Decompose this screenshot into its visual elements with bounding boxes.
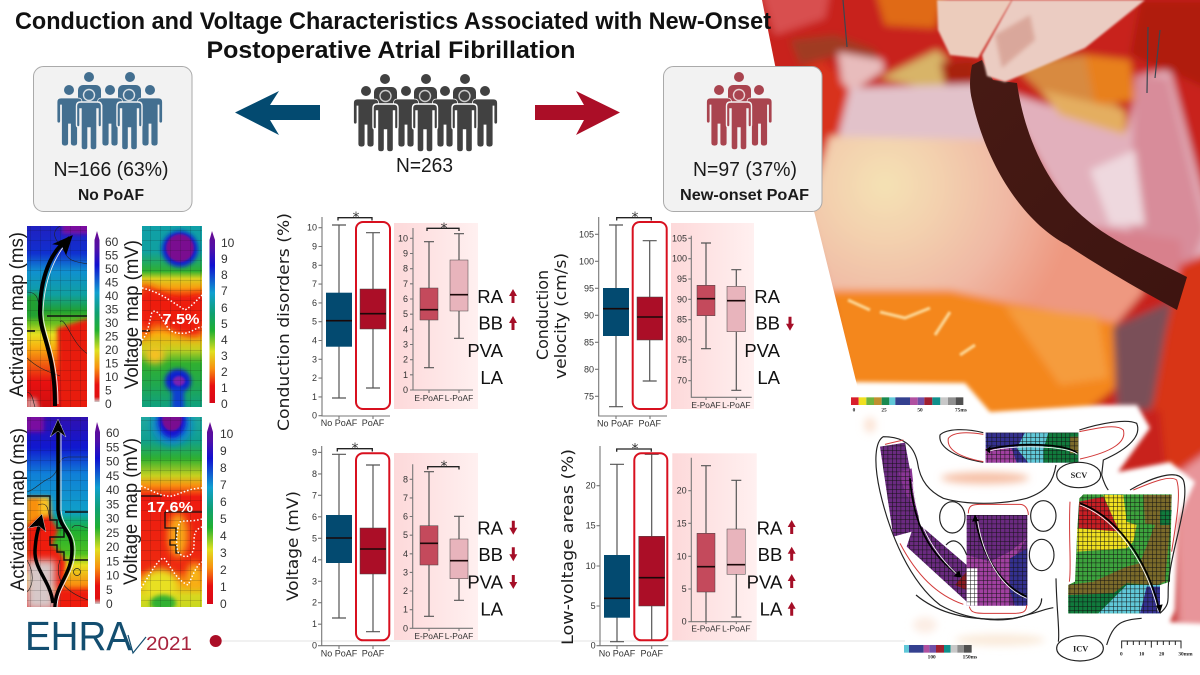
colour bar: activation: 20 [105, 343, 119, 357]
regional labels and arrows [744, 286, 794, 388]
x labels [321, 649, 385, 659]
inset panel: early and late PoAF: * [440, 459, 448, 475]
colour bar: voltage: 9 [221, 252, 228, 266]
significance bracket: * [352, 441, 358, 457]
panel: maps of patient with PoAF [8, 404, 234, 611]
y axis label: Voltage (mV) [283, 491, 302, 601]
photo: gloved fingers [937, 0, 1012, 58]
regional labels and arrows: PVA [467, 340, 504, 361]
colour bar: activation: 15 [105, 356, 119, 370]
chart: conduction disorders: 5 [312, 317, 317, 327]
significance bracket: * [632, 442, 638, 458]
regional labels and arrows: RA [754, 286, 781, 307]
inset panel: early and late PoAF [671, 223, 754, 410]
white fade behind the epicardial mapping scheme [840, 382, 1200, 675]
regional labels and arrows: BB [758, 544, 782, 565]
background photo: opened heart during surgery [762, 0, 1200, 626]
dark area and right red tissue [1113, 300, 1175, 410]
regional labels and arrows: BB [478, 544, 503, 565]
chart: conduction velocity: 105 [579, 229, 594, 239]
heat map: activation [27, 226, 87, 407]
legend: bottom colour scale: 150ms [963, 655, 977, 661]
chart: voltage: 5 [312, 533, 317, 543]
inset panel: early and late PoAF: * [440, 221, 448, 237]
scale bar [1120, 641, 1193, 658]
x labels: PoAF [638, 419, 661, 429]
y axis label: Low-voltage areas (%) [558, 449, 577, 645]
colour bar: voltage: 9 [220, 444, 227, 458]
inset panel: early and late PoAF: 5 [403, 530, 408, 540]
inset panel: early and late PoAF: E-PoAF [691, 400, 721, 410]
colour bar: voltage: 1 [220, 580, 227, 594]
box: No PoAF [604, 464, 630, 642]
y axis label: Conduction disorders (%) [274, 213, 293, 431]
label: No PoAF: No PoAF [78, 187, 144, 204]
x labels [597, 419, 661, 429]
chart: voltage: 2 [312, 598, 317, 608]
inset panel: early and late PoAF: 10 [677, 551, 687, 561]
colour bar: activation: 45 [106, 469, 120, 483]
chart: conduction velocity [533, 210, 794, 429]
pericardium band [838, 84, 990, 145]
colour bar: activation: 50 [106, 454, 120, 468]
label: SCV [1057, 462, 1101, 488]
colour bar: voltage: 2 [220, 563, 227, 577]
colour bar: voltage: 3 [220, 546, 227, 560]
colour bar: activation: 15 [106, 554, 120, 568]
chart: low-voltage areas: 20 [586, 481, 596, 491]
logo: EHRA 2021 [25, 613, 222, 659]
inset panel: early and late PoAF: E-PoAF [691, 624, 721, 634]
colour bar: activation: 40 [106, 483, 120, 497]
inset panel: early and late PoAF: 85 [677, 315, 687, 325]
regional labels and arrows: LA [480, 598, 504, 620]
inset panel: early and late PoAF: 80 [677, 335, 687, 345]
inset panel: early and late PoAF: 1 [403, 370, 408, 380]
chart: conduction velocity: 80 [584, 364, 594, 374]
label: N=97 (37%): N=97 (37%) [693, 159, 797, 181]
inset panel: early and late PoAF [394, 453, 478, 641]
inset panel: early and late PoAF [672, 453, 757, 640]
label: ICV [1057, 636, 1103, 661]
regional labels and arrows: RA [477, 518, 504, 538]
y axis label: velocity (cm/s) [551, 253, 570, 379]
significance bracket [617, 210, 651, 226]
map: superior right atrium strip [986, 433, 1078, 463]
legend: bottom colour scale: 100 [928, 655, 936, 661]
colour bar: activation: 40 [105, 289, 119, 303]
title: Postoperative Atrial Fibrillation [206, 37, 576, 64]
colour bar: voltage: 3 [221, 349, 228, 363]
colour bar: voltage [210, 231, 235, 411]
axis label: voltage map: Voltage map (mV) [121, 438, 142, 585]
orange fat [830, 290, 1115, 420]
colour bar: voltage: 10 [220, 427, 234, 441]
y axis label: Conduction [533, 270, 552, 360]
chart: low-voltage areas: 0 [591, 641, 596, 651]
regional labels and arrows [747, 518, 796, 620]
arrow: to No PoAF [235, 91, 320, 135]
x labels: PoAF [362, 649, 385, 659]
colour bar: activation: 60 [105, 235, 119, 249]
chart: conduction velocity: 85 [584, 337, 594, 347]
colour bar: activation: 30 [106, 512, 120, 526]
regional labels and arrows: RA [757, 518, 783, 538]
colour bar: voltage: 5 [221, 317, 228, 331]
y axis label [533, 253, 570, 379]
x labels: PoAF [640, 649, 663, 659]
icon: people group (red) [706, 72, 772, 150]
chart: low-voltage areas: 15 [586, 521, 596, 531]
arrows: conduction paths [28, 419, 75, 607]
inset panel: early and late PoAF: 100 [672, 254, 687, 264]
heat map: activation [27, 417, 88, 607]
significance bracket: * [632, 210, 638, 226]
chart: voltage: 9 [312, 447, 317, 457]
axis label: voltage map: Voltage map (mV) [122, 240, 143, 389]
inset panel: early and late PoAF: 90 [677, 294, 687, 304]
inset panel: early and late PoAF: 4 [403, 324, 408, 334]
inset panel: early and late PoAF: 3 [403, 340, 408, 350]
regional labels and arrows [467, 286, 517, 388]
logo line [222, 640, 905, 642]
inset panel: early and late PoAF: 2 [403, 355, 408, 365]
inset panel: early and late PoAF: E-PoAF [414, 631, 444, 641]
inset panel: early and late PoAF: 15 [677, 518, 687, 528]
legend: bottom colour scale [904, 645, 977, 661]
colour bar: activation: 45 [105, 276, 119, 290]
box: PoAF [639, 454, 665, 640]
box: No PoAF [603, 225, 629, 407]
logo: EHRA 2021: EHRA [25, 613, 133, 659]
chart: conduction disorders: 9 [312, 242, 317, 252]
low-voltage contour [142, 288, 202, 340]
heat map: voltage [141, 404, 203, 611]
inset panel: early and late PoAF: 8 [403, 474, 408, 484]
panel: total population [354, 74, 498, 177]
chart: voltage: 8 [312, 469, 317, 479]
box: PoAF [360, 233, 386, 388]
significance bracket [338, 210, 372, 226]
label: N=263: N=263 [396, 155, 453, 177]
label: N=166 (63%): N=166 (63%) [54, 159, 168, 181]
colour bar: activation: 50 [105, 262, 119, 276]
colour bar: activation: 55 [106, 440, 120, 454]
box: No PoAF [326, 454, 352, 618]
regional labels and arrows: LA [760, 598, 783, 620]
inset panel: early and late PoAF: 1 [403, 605, 408, 615]
colour bar: activation: 25 [105, 330, 119, 344]
colour bar: voltage: 1 [221, 381, 228, 395]
box: PoAF [637, 241, 663, 381]
big pale atrium [808, 136, 1145, 325]
logo: EHRA 2021: 2021 [146, 634, 192, 655]
title [15, 8, 771, 64]
chart: conduction disorders: 3 [312, 354, 317, 364]
inset panel: early and late PoAF: L-PoAF [722, 400, 751, 410]
x labels: No PoAF [597, 419, 634, 429]
diagram: epicardial mapping scheme of the atria [851, 397, 1193, 661]
box: No PoAF [326, 225, 352, 398]
colour bar: voltage: 8 [221, 268, 228, 282]
colour bar: activation: 35 [106, 497, 120, 511]
inset panel: early and late PoAF: 70 [677, 376, 687, 386]
colour bar: voltage: 7 [221, 284, 228, 298]
chart: conduction disorders: 6 [312, 298, 317, 308]
colour bar: voltage: 4 [220, 529, 227, 543]
regional labels and arrows: BB [755, 312, 780, 334]
inset panel: early and late PoAF: L-PoAF [722, 624, 751, 634]
legend: top colour scale: 50 [917, 408, 923, 414]
low-voltage contour [141, 486, 202, 588]
chart: conduction velocity: 90 [584, 310, 594, 320]
regional labels and arrows [467, 518, 517, 620]
chart: conduction disorders: 8 [312, 260, 317, 270]
regional labels and arrows: PVA [467, 572, 504, 592]
colour bar: activation: 0 [106, 597, 113, 611]
significance bracket: * [352, 210, 360, 226]
upper right tissue [1018, 62, 1200, 266]
chart: low-voltage areas: 10 [586, 561, 596, 571]
callout: 7.5%: 7.5% [162, 311, 200, 328]
arrow: conduction path [40, 236, 72, 406]
inset panel: early and late PoAF: 7 [403, 493, 408, 503]
regional labels and arrows: PVA [747, 572, 783, 592]
axis label: activation map: Activation map (ms) [8, 428, 29, 591]
colour bar: activation: 25 [106, 526, 120, 540]
faint tissue patches in the white fade [864, 417, 1045, 646]
colour bar: activation [94, 231, 119, 411]
inset panel: early and late PoAF: 10 [398, 233, 408, 243]
photo: sutures [843, 0, 1160, 93]
inset panel: early and late PoAF: 8 [403, 264, 408, 274]
highlight: PoAF outline [356, 453, 389, 640]
inset panel: early and late PoAF: 3 [403, 567, 408, 577]
highlight: PoAF outline [633, 222, 667, 409]
chart: conduction disorders: 1 [312, 392, 317, 402]
inset panel: early and late PoAF: L-PoAF [445, 393, 473, 403]
chart: voltage: 7 [312, 490, 317, 500]
callout: 17.6%: 17.6% [147, 499, 193, 516]
inset panel: early and late PoAF: E-PoAF [414, 393, 444, 403]
colour bar: voltage [207, 422, 234, 611]
legend: top colour scale [851, 397, 967, 414]
photo: fat highlights [848, 300, 975, 355]
colour bar: voltage: 5 [220, 512, 227, 526]
x labels [599, 649, 663, 659]
legend: top colour scale: 0 [853, 408, 856, 414]
main axes [595, 217, 667, 419]
colour bar: voltage: 7 [220, 478, 227, 492]
inset panel: early and late PoAF: 5 [682, 584, 687, 594]
inset panel: early and late PoAF: 6 [403, 512, 408, 522]
chart: low-voltage areas: 5 [591, 601, 596, 611]
colour bar: voltage: 6 [220, 495, 227, 509]
regional labels and arrows: PVA [744, 340, 781, 361]
colour bar: activation: 20 [106, 540, 120, 554]
inset panel: early and late PoAF: 2 [403, 586, 408, 596]
x labels: No PoAF [321, 418, 358, 428]
colour bar: activation [95, 422, 120, 611]
anatomical outline: inner red lines [885, 427, 1178, 613]
inset panel: early and late PoAF: 4 [403, 549, 408, 559]
chart: conduction disorders [274, 210, 517, 431]
significance bracket [337, 441, 372, 457]
regional labels and arrows: LA [757, 367, 781, 388]
colour bar: voltage: 6 [221, 301, 228, 315]
inset panel: early and late PoAF: 5 [403, 309, 408, 319]
panel: maps of patient without PoAF [7, 222, 235, 411]
chart: voltage: 3 [312, 576, 317, 586]
chart: conduction velocity: 95 [584, 283, 594, 293]
colour bar: activation: 30 [105, 316, 119, 330]
label: New-onset PoAF: New-onset PoAF [680, 187, 809, 204]
arrows: conduction direction [910, 445, 1163, 613]
label: ICV: ICV [1073, 645, 1088, 654]
legend: top colour scale: 75ms [955, 408, 967, 414]
colour bar: activation: 5 [105, 384, 112, 398]
inset panel: early and late PoAF: 9 [403, 248, 408, 258]
chart: voltage: 0 [312, 641, 317, 651]
inset panel: early and late PoAF: 7 [403, 279, 408, 289]
chart: conduction disorders: 4 [312, 336, 317, 346]
highlight: PoAF outline [356, 222, 390, 409]
inset panel: early and late PoAF: 95 [677, 274, 687, 284]
chart: conduction velocity: 75 [584, 391, 594, 401]
inset panel: early and late PoAF: 20 [677, 486, 687, 496]
colour bar: activation: 10 [105, 370, 119, 384]
main axes [318, 446, 390, 649]
icon: people group (grey) [354, 74, 498, 152]
x labels: No PoAF [321, 649, 358, 659]
title: Conduction and Voltage Characteristics Associated with New-Onset [15, 8, 771, 35]
inset panel: early and late PoAF: L-PoAF [445, 631, 473, 641]
map: left strip [880, 443, 967, 602]
map: central patch [967, 515, 1027, 606]
heat map: voltage [142, 226, 202, 410]
colour bar: voltage: 8 [220, 461, 227, 475]
main axes [596, 446, 668, 649]
main axes [318, 217, 390, 419]
regional labels and arrows: BB [478, 312, 503, 334]
panel: New-onset PoAF group [664, 66, 822, 212]
inset panel: early and late PoAF: 0 [682, 617, 687, 627]
chart: voltage [283, 441, 517, 659]
colour bar: voltage: 0 [220, 597, 227, 611]
colour bar: activation: 35 [105, 302, 119, 316]
colour bar: activation: 55 [105, 248, 119, 262]
colour bar: activation: 10 [106, 568, 120, 582]
axis label: activation map: Activation map (ms) [7, 232, 28, 397]
map: right atrial patch [1068, 494, 1172, 613]
colour bar: voltage: 4 [221, 333, 228, 347]
box: PoAF [360, 465, 386, 632]
photo: dark ribbon electrode [970, 60, 1187, 310]
inset panel: early and late PoAF: 105 [672, 233, 687, 243]
icon: people group (blue) [57, 72, 162, 150]
inset panel: early and late PoAF: 0 [403, 385, 408, 395]
x labels: PoAF [362, 418, 385, 428]
scale bar: 10 [1139, 652, 1145, 658]
colour bar: voltage: 2 [221, 365, 228, 379]
chart: conduction disorders: 2 [312, 373, 317, 383]
arrow: to New-onset PoAF [535, 91, 620, 135]
chart: conduction velocity: 100 [579, 256, 594, 266]
chart: conduction disorders: 10 [307, 223, 317, 233]
colour bar: voltage: 0 [221, 397, 228, 411]
chart: conduction disorders: 0 [312, 411, 317, 421]
scale bar: 30mm [1178, 652, 1193, 658]
chart: voltage: 4 [312, 555, 317, 565]
regional labels and arrows: LA [480, 367, 504, 388]
anatomical outline [876, 421, 1185, 645]
legend: top colour scale: 25 [881, 408, 887, 414]
scale bar: 20 [1159, 652, 1165, 658]
x labels: No PoAF [599, 649, 636, 659]
inset panel: early and late PoAF: 75 [677, 355, 687, 365]
chart: voltage: 1 [312, 619, 317, 629]
scale bar: 0 [1120, 652, 1123, 658]
chart: low-voltage areas [558, 442, 796, 659]
chart: conduction disorders: 7 [312, 279, 317, 289]
inset panel: early and late PoAF: 6 [403, 294, 408, 304]
inset panel: early and late PoAF [394, 221, 478, 409]
x labels [321, 418, 385, 428]
chart: voltage: 6 [312, 512, 317, 522]
colour bar: activation: 0 [105, 397, 112, 411]
panel: No PoAF group [34, 66, 192, 212]
inset panel: early and late PoAF: 0 [403, 623, 408, 633]
colour bar: voltage: 10 [221, 236, 235, 250]
regional labels and arrows: RA [477, 286, 504, 307]
highlight: PoAF outline [634, 453, 667, 640]
label: SCV: SCV [1071, 471, 1087, 480]
colour bar: activation: 60 [106, 426, 120, 440]
colour bar: activation: 5 [106, 583, 113, 597]
significance bracket [617, 442, 651, 458]
